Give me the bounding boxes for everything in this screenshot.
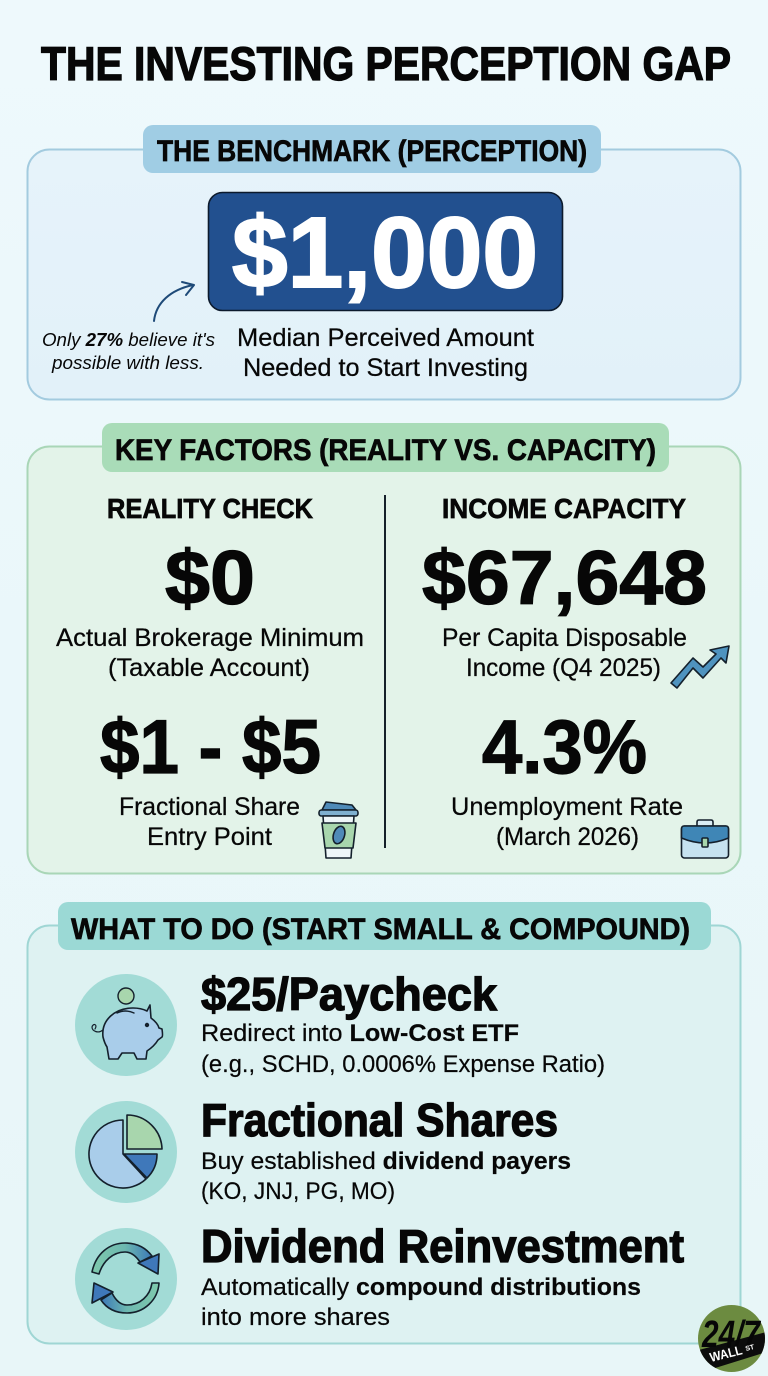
- annotation: only 27%: Only 27% believe it's: [42, 330, 215, 350]
- heading pill: what to do: [58, 902, 711, 950]
- stat: $67,648: Per Capita Disposable: [442, 624, 687, 652]
- stat: $0: [56, 536, 364, 682]
- item text: $25/Paycheck: (e.g., SCHD, 0.0006% Expense Ratio): [201, 1051, 605, 1078]
- heading pill: what to do: WHAT TO DO (START SMALL & COMPOUND): [71, 913, 690, 946]
- stat: 4.3%: 4.3%: [482, 705, 647, 790]
- panel: the benchmark: [28, 125, 740, 400]
- column: income capacity: [422, 493, 729, 858]
- caption: median perceived amount: [237, 324, 534, 382]
- logo: 24/7 Wall St: [695, 1305, 768, 1372]
- icon: rising trend arrow: [671, 646, 729, 688]
- logo: 24/7 Wall St: ST: [745, 1344, 756, 1353]
- stat: $67,648: [422, 536, 707, 682]
- item text: dividend reinvestment: Automatically compound distributions: [201, 1274, 641, 1301]
- stat: $67,648: Income (Q4 2025): [466, 654, 661, 682]
- logo: 24/7 Wall St: WALL: [708, 1342, 744, 1365]
- item text: dividend reinvestment: Dividend Reinvestment: [201, 1220, 684, 1272]
- stat: 4.3%: Unemployment Rate: [451, 793, 683, 821]
- stat: $1 - $5: Fractional Share: [119, 793, 300, 821]
- subheading: income capacity: INCOME CAPACITY: [442, 493, 686, 524]
- stat: $1 - $5: [100, 705, 321, 851]
- heading pill: the benchmark: THE BENCHMARK (PERCEPTION): [157, 135, 587, 168]
- panel: what to do: [28, 902, 740, 1344]
- subheading: reality check: REALITY CHECK: [107, 493, 313, 524]
- column: reality check: [56, 493, 364, 858]
- item text: fractional shares: (KO, JNJ, PG, MO): [201, 1178, 395, 1205]
- icon: reinvestment arrows: [75, 1228, 177, 1330]
- icon: piggy bank: [75, 974, 177, 1076]
- heading pill: the benchmark: [143, 125, 601, 173]
- item text: dividend reinvestment: [201, 1220, 684, 1331]
- arrow: [154, 282, 194, 321]
- icon: coffee cup: [319, 802, 358, 858]
- heading pill: key factors: [102, 423, 669, 472]
- heading pill: key factors: KEY FACTORS (REALITY VS. CAPACITY): [115, 434, 656, 467]
- panel: key factors: [28, 423, 740, 874]
- stat: $1 - $5: $1 - $5: [100, 705, 321, 790]
- divider: [384, 495, 386, 848]
- stat: $0: $0: [165, 536, 255, 621]
- stat: $67,648: $67,648: [422, 536, 707, 621]
- annotation: only 27%: [42, 330, 215, 373]
- callout box: $1,000: $1,000: [232, 197, 538, 309]
- item text: dividend reinvestment: into more shares: [201, 1304, 390, 1331]
- item text: $25/Paycheck: Redirect into Low-Cost ETF: [201, 1020, 519, 1047]
- item text: $25/Paycheck: $25/Paycheck: [201, 968, 497, 1020]
- item text: fractional shares: [201, 1094, 571, 1205]
- icon: briefcase: [682, 820, 728, 858]
- caption: median perceived amount: Needed to Start Investing: [243, 354, 528, 382]
- annotation: only 27%: possible with less.: [51, 353, 204, 373]
- stat: 4.3%: [451, 705, 683, 851]
- stat: $0: (Taxable Account): [108, 654, 310, 682]
- stat: $0: Actual Brokerage Minimum: [56, 624, 364, 652]
- caption: median perceived amount: Median Perceived Amount: [237, 324, 534, 352]
- stat: 4.3%: (March 2026): [496, 823, 639, 851]
- stat: $1 - $5: Entry Point: [147, 823, 272, 851]
- icon: pie chart: [75, 1101, 177, 1203]
- item text: fractional shares: Fractional Shares: [201, 1094, 558, 1146]
- item text: $25/Paycheck: [201, 968, 605, 1078]
- item text: fractional shares: Buy established dividend payers: [201, 1148, 571, 1175]
